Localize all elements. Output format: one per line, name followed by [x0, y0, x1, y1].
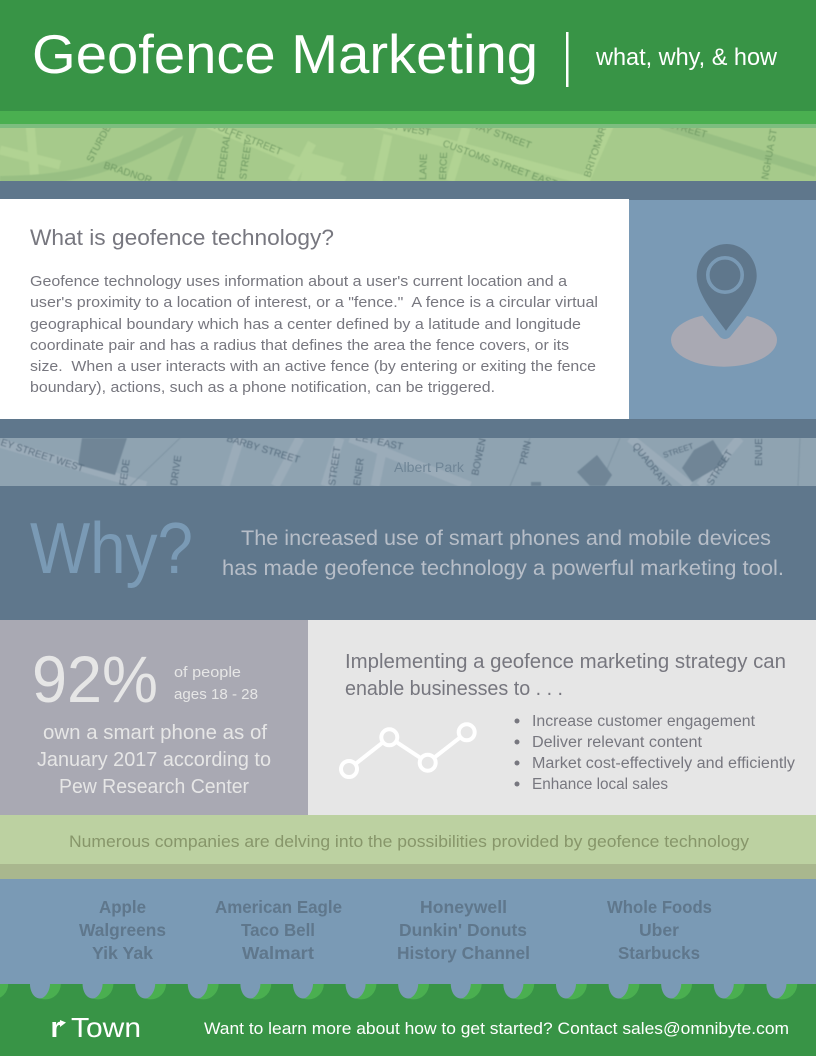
- big number: 92%: [32, 642, 158, 716]
- companies intro text: Numerous companies are delving into the possibilities provided by geofence technology: [69, 832, 750, 851]
- slate street map band: FEDE: [118, 458, 133, 486]
- footer: [0, 984, 816, 1056]
- why statement: The increased use of smart phones and mobile devices: [241, 527, 771, 550]
- green street map band: [0, 124, 816, 181]
- body paragraph: boundary), actions, such as a phone notification, can be triggered.: [30, 379, 495, 396]
- green street map band: WAY STREET: [469, 119, 533, 152]
- panel: what is geofence technology: [0, 199, 629, 419]
- slate street map band: BOWEN: [470, 437, 489, 477]
- title: Geofence Marketing: [32, 23, 538, 85]
- panel: why: [0, 486, 816, 620]
- column 3: History Channel: [397, 943, 530, 963]
- header banner: [0, 0, 816, 124]
- green street map band: FEDERAL: [216, 133, 233, 180]
- slate street map band: STREET: [327, 446, 343, 486]
- bullet list: Increase customer engagement: [532, 713, 756, 730]
- column 2: Taco Bell: [241, 920, 315, 940]
- slate divider band: [0, 181, 816, 200]
- slate street map band: ENER: [352, 457, 367, 486]
- map label: Albert Park: [394, 460, 464, 475]
- slate street map band: DRIVE: [169, 454, 184, 486]
- green street map band: BRADNOR: [102, 160, 153, 186]
- slate street map band: EET EAST: [354, 432, 404, 453]
- column 3: Honeywell: [420, 897, 507, 917]
- green street map band: EET WEST: [379, 119, 432, 139]
- slate street map band: BARBY STREET: [225, 433, 301, 466]
- contact line: Want to learn more about how to get started? Contact sales@omnibyte.com: [204, 1020, 789, 1038]
- column 1: [79, 897, 166, 963]
- statistic description: January 2017 according to: [37, 749, 271, 771]
- green street map band: LANE: [418, 153, 430, 180]
- slate street map band: ENUE: [754, 438, 765, 466]
- number caption: ages 18 - 28: [174, 686, 258, 703]
- panel: statistic: [0, 620, 308, 815]
- number caption: of people: [174, 664, 241, 681]
- slate street map band: STREET: [705, 448, 735, 488]
- body paragraph: user's proximity to a location of interest, or a "fence." A fence is a circular virtual: [30, 294, 598, 311]
- column 1: Walgreens: [79, 920, 166, 940]
- number caption: [174, 664, 258, 703]
- green street map band: CUSTOMS STREET EAST: [441, 138, 558, 190]
- logo: r: [50, 1012, 62, 1044]
- building block: [78, 438, 127, 475]
- panel: company names: [0, 879, 816, 984]
- column 3: Dunkin' Donuts: [399, 920, 527, 940]
- body paragraph: geographical boundary which has a center defined by a latitude and longitude: [30, 316, 581, 333]
- bullet list: [514, 713, 795, 793]
- green street map band: NGHUA ST: [760, 128, 780, 181]
- column 4: Starbucks: [618, 943, 700, 963]
- heading: What is geofence technology?: [30, 225, 334, 250]
- strategy heading: enable businesses to . . .: [345, 678, 563, 700]
- column 2: Walmart: [242, 943, 314, 963]
- body paragraph: Geofence technology uses information about a user's current location and a: [30, 273, 568, 290]
- scalloped edge: [0, 984, 797, 999]
- icon: location pin on ground: [671, 244, 777, 367]
- bullet list: Deliver relevant content: [532, 734, 703, 751]
- panel: companies intro: [0, 815, 816, 879]
- bullet list: Market cost-effectively and efficiently: [532, 755, 795, 772]
- statistic description: [37, 722, 271, 798]
- green street map band: STREET: [667, 119, 708, 141]
- statistic description: Pew Research Center: [59, 776, 249, 798]
- why statement: has made geofence technology a powerful marketing tool.: [222, 557, 784, 580]
- body paragraph: size. When a user interacts with an active fence (by entering or exiting the fence: [30, 358, 596, 375]
- subtitle: what, why, & how: [595, 44, 778, 71]
- logo: [50, 1012, 141, 1044]
- column 4: Whole Foods: [607, 897, 712, 917]
- strategy heading: Implementing a geofence marketing strategy can: [345, 651, 786, 673]
- bullet list: Enhance local sales: [532, 776, 668, 793]
- column 3: [397, 897, 530, 963]
- column 1: Apple: [99, 897, 146, 917]
- title divider: [566, 32, 568, 87]
- strategy heading: [345, 651, 786, 700]
- why heading: Why?: [30, 509, 193, 589]
- green street map band: ERCE: [438, 152, 450, 180]
- column 2: American Eagle: [215, 897, 342, 917]
- icon: line chart: [341, 724, 475, 777]
- green street map band: BRITOMART: [582, 120, 611, 179]
- green street map band: WOLFE STREET: [207, 119, 283, 158]
- slate divider band: [0, 419, 816, 438]
- column 4: [607, 897, 712, 963]
- panel: location pin: [629, 200, 816, 419]
- logo: Town: [71, 1012, 141, 1043]
- why statement: [222, 527, 784, 580]
- green street map band: STURDEE: [85, 117, 117, 164]
- column 1: Yik Yak: [92, 943, 153, 963]
- body paragraph: [30, 273, 598, 396]
- slate street map band: STREET: [662, 442, 695, 460]
- column 2: [215, 897, 342, 963]
- green street map band: STREET: [238, 140, 254, 180]
- column 4: Uber: [639, 920, 679, 940]
- slate street map band: EY STREET WEST: [0, 437, 85, 475]
- slate street map band: [0, 438, 816, 486]
- slate street map band: QUADRANT: [630, 441, 673, 492]
- statistic description: own a smart phone as of: [43, 722, 267, 744]
- body paragraph: coordinate pair and has a radius that defines the area the fence covers, or its: [30, 337, 569, 354]
- slate street map band: PRIN: [518, 440, 534, 466]
- panel: strategy: [308, 620, 816, 815]
